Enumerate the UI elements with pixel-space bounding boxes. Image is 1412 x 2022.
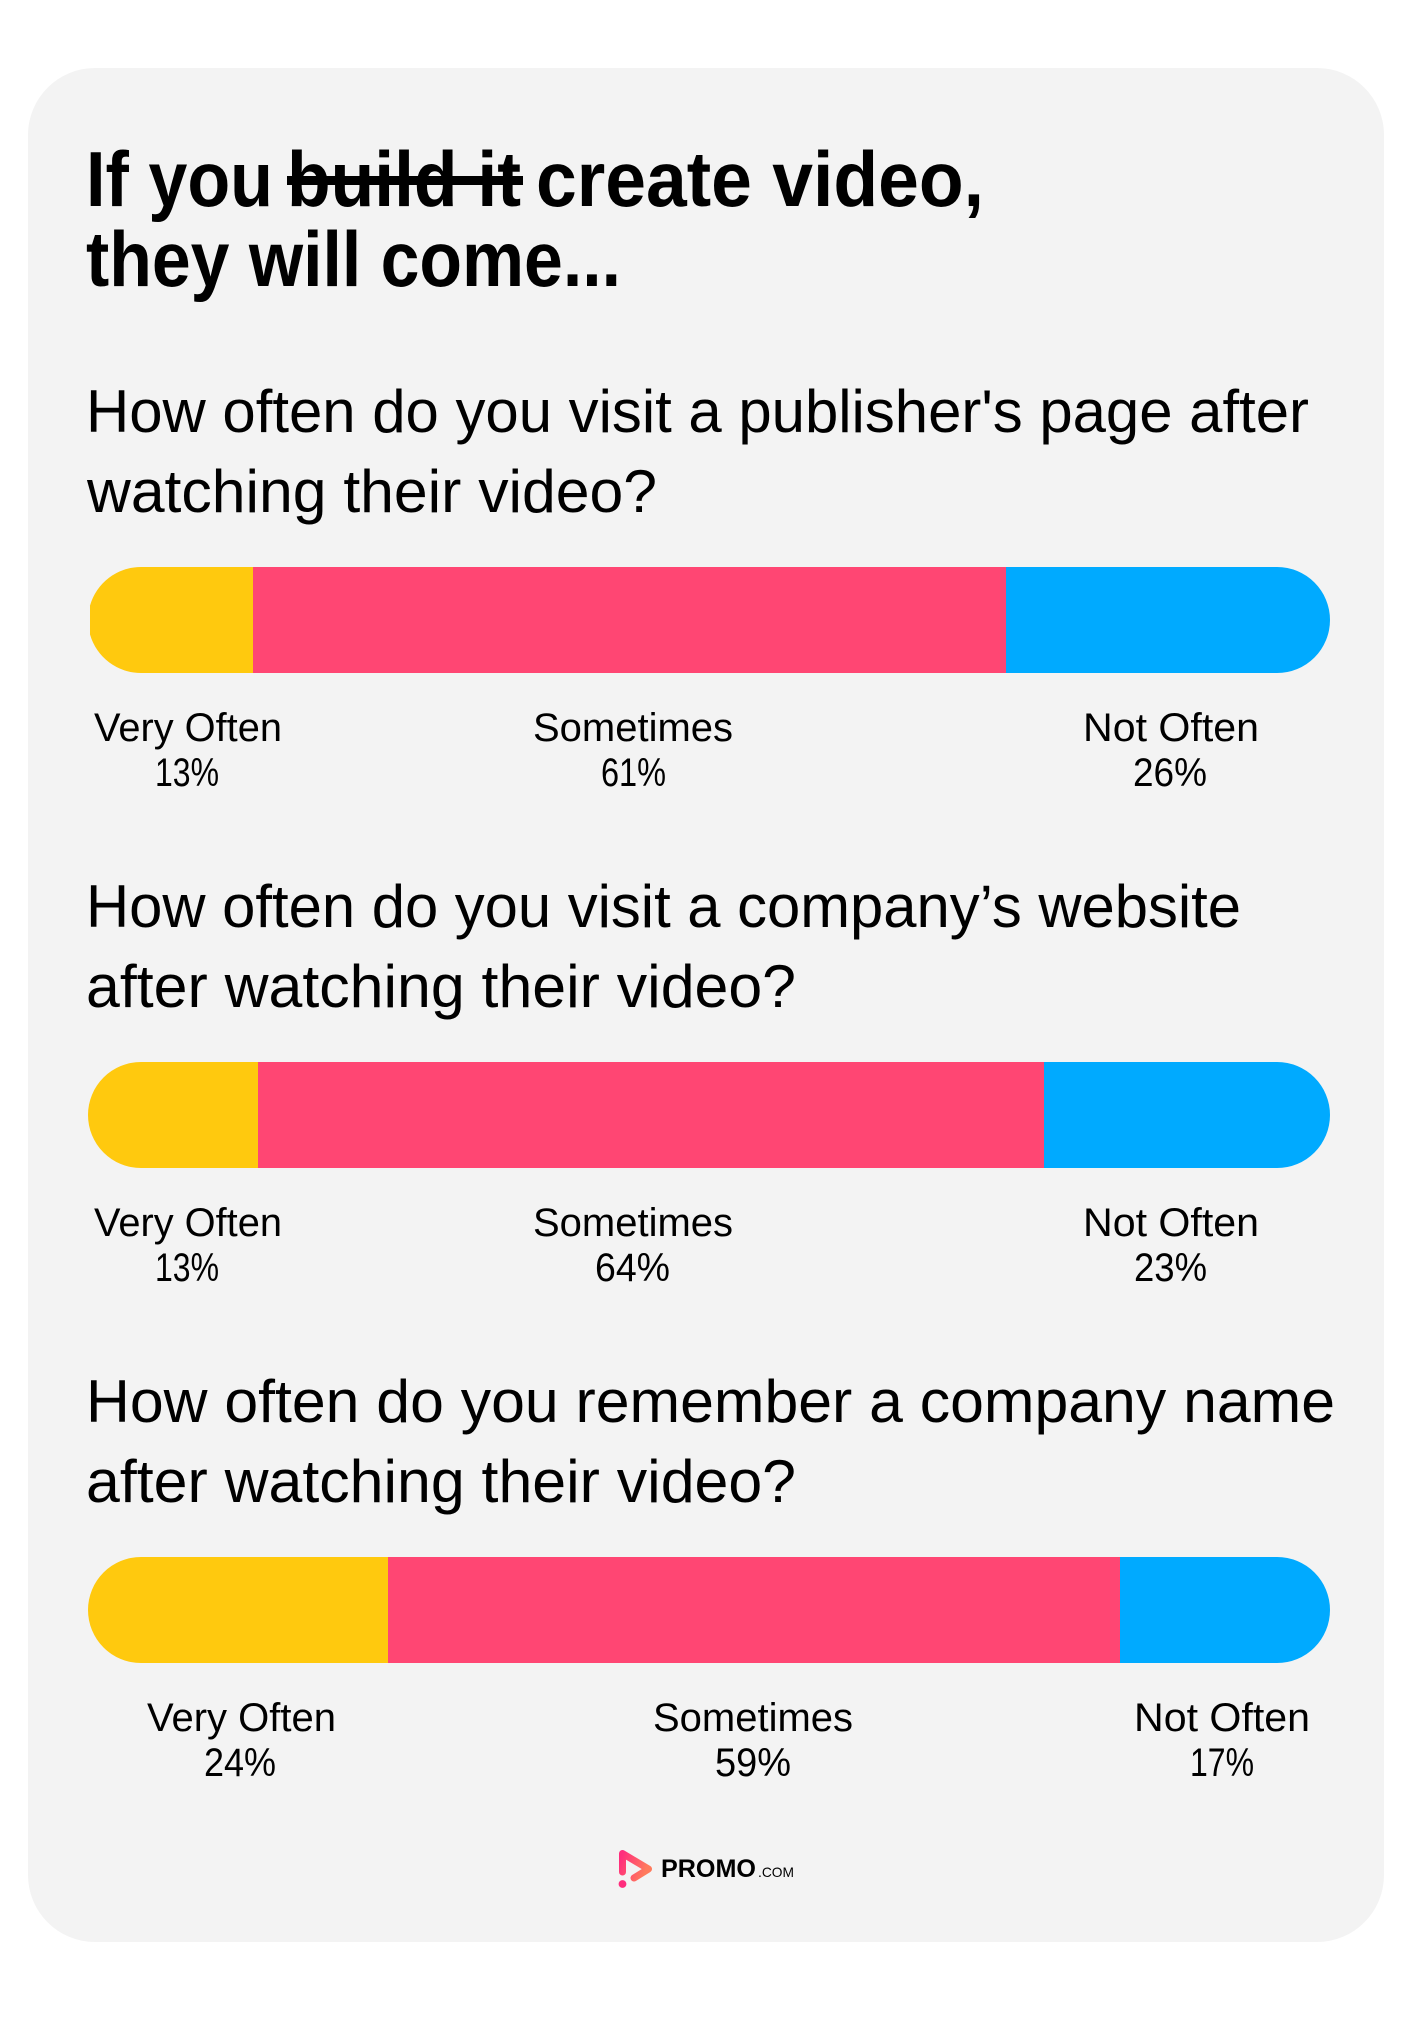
label: not often 17%: 17% (1190, 1741, 1254, 1785)
title: they will come... (86, 215, 621, 303)
question 1: watching their video? (86, 458, 657, 525)
label: very often 13% (94, 1201, 282, 1290)
label: very often 24%: 24% (204, 1741, 276, 1785)
label: sometimes 61% (533, 706, 733, 795)
question 3: How often do you remember a company name (86, 1368, 1335, 1435)
label: sometimes 61%: 61% (601, 751, 666, 795)
section 2: company website (86, 873, 1330, 1290)
title (86, 135, 984, 303)
label: not often 26%: 26% (1133, 751, 1207, 795)
label: very often 24% (147, 1696, 336, 1785)
label: very often 24%: Very Often (147, 1696, 336, 1740)
label: not often 23% (1083, 1201, 1259, 1290)
label: not often 23%: Not Often (1083, 1201, 1259, 1245)
label: not often 17%: Not Often (1134, 1696, 1310, 1740)
title: create video, (536, 135, 984, 223)
label: sometimes 64%: Sometimes (533, 1201, 733, 1245)
question 3 (86, 1368, 1335, 1515)
stacked bar 2 (88, 1062, 1330, 1168)
label: sometimes 64%: 64% (595, 1246, 670, 1290)
label: very often 13%: 13% (155, 1246, 219, 1290)
label: very often 13%: 13% (155, 751, 219, 795)
label: sometimes 64% (533, 1201, 733, 1290)
question 2: How often do you visit a company’s website (86, 873, 1241, 940)
question 2 (86, 873, 1241, 1020)
wordmark: PROMO (661, 1855, 756, 1883)
label: not often 23%: 23% (1134, 1246, 1207, 1290)
label: sometimes 61%: Sometimes (533, 706, 733, 750)
struck-through words: build it (287, 135, 521, 223)
label: not often 26% (1083, 706, 1259, 795)
section 3: company name (86, 1368, 1335, 1785)
label: not often 17% (1134, 1696, 1310, 1785)
label: very often 13%: Very Often (94, 706, 282, 750)
stacked bar 3 (88, 1557, 1330, 1663)
stacked bar 1 (90, 567, 1330, 673)
question 3: after watching their video? (86, 1448, 796, 1515)
wordmark: .COM (758, 1864, 794, 1880)
question 1: How often do you visit a publisher's page after (86, 378, 1309, 445)
question 1 (86, 378, 1309, 525)
label: sometimes 59%: 59% (715, 1741, 791, 1785)
question 2: after watching their video? (86, 953, 796, 1020)
label: very often 13% (94, 706, 282, 795)
label: very often 13%: Very Often (94, 1201, 282, 1245)
label: sometimes 59%: Sometimes (653, 1696, 853, 1740)
icon: play mark (619, 1854, 648, 1888)
logo: promo.com (619, 1854, 794, 1888)
section 1: publisher's page (86, 378, 1330, 795)
label: not often 26%: Not Often (1083, 706, 1259, 750)
label: sometimes 59% (653, 1696, 853, 1785)
title: If you (86, 135, 273, 223)
